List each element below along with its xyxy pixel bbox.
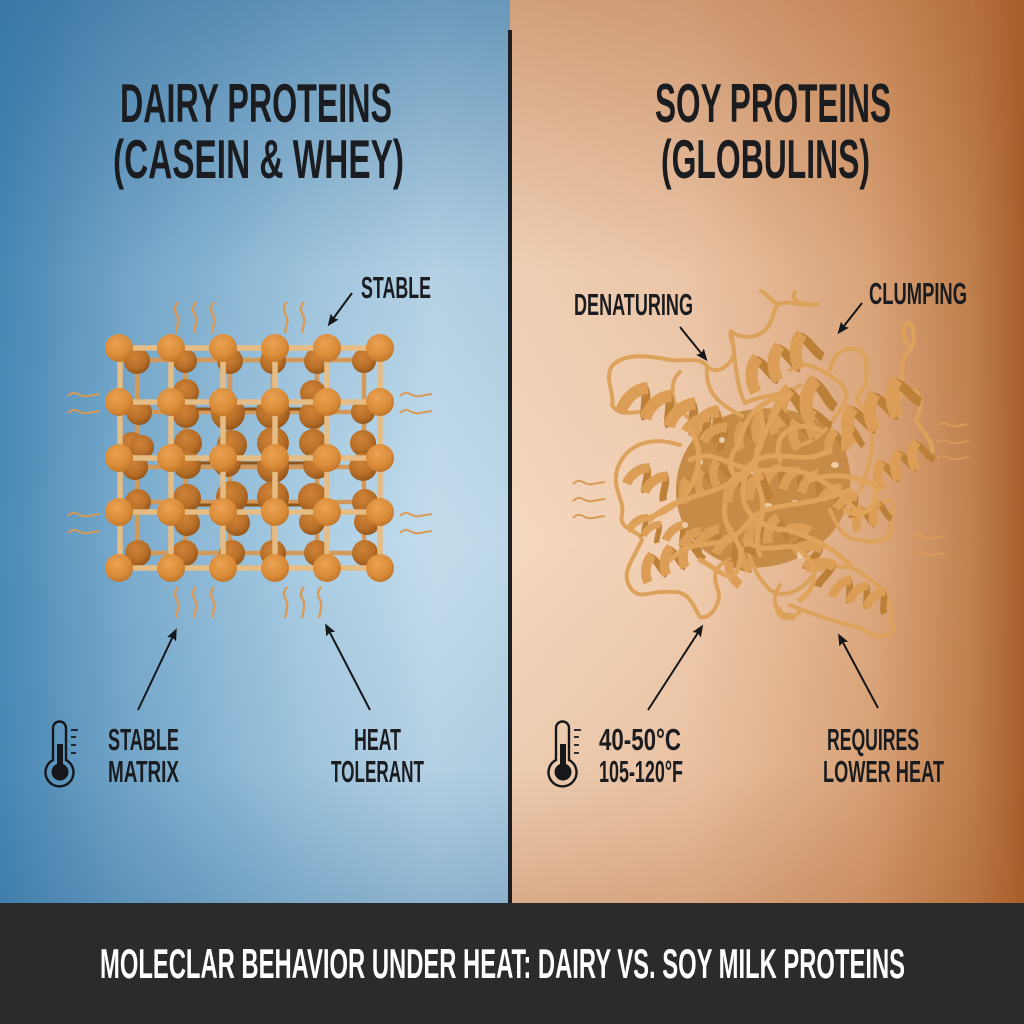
- label: temperature range: 105-120°F: [599, 754, 683, 789]
- chart: denatured soy protein tangle: [609, 291, 934, 636]
- label: stable matrix: MATRIX: [108, 754, 179, 789]
- center divider: [508, 30, 512, 903]
- heading: dairy proteins: DAIRY PROTEINS: [120, 72, 392, 134]
- label: stable matrix: STABLE: [108, 722, 179, 757]
- inner tangle strands: [630, 395, 876, 600]
- light gaps: [682, 437, 839, 559]
- callout: lower heat arrow: [840, 637, 878, 708]
- label: requires lower heat: REQUIRES: [827, 722, 919, 757]
- label: stable matrix: [108, 722, 179, 789]
- heat waves around soy tangle: [573, 423, 969, 555]
- callout: stable matrix arrow: [138, 632, 175, 710]
- heading: soy proteins: (GLOBULINS): [661, 128, 870, 190]
- outer helices: [621, 382, 727, 442]
- tangle core shading: [676, 408, 850, 568]
- callout: stable: [330, 270, 431, 323]
- callout: denaturing: [574, 287, 705, 358]
- heading: soy proteins: [655, 72, 891, 190]
- footer bar: [0, 903, 1024, 1024]
- label: heat tolerant: TOLERANT: [331, 754, 424, 789]
- icon: thermometer dairy: [45, 722, 78, 786]
- chart: stable protein lattice: [105, 334, 394, 582]
- icon: thermometer soy: [548, 722, 581, 786]
- callout: stable: STABLE: [361, 270, 431, 305]
- label: temperature range: 40-50°C: [599, 722, 681, 757]
- label: requires lower heat: LOWER HEAT: [823, 754, 944, 789]
- inner helices: [685, 410, 733, 452]
- callout: heat tolerant arrow: [327, 627, 370, 710]
- panel: soy proteins background: [510, 0, 1024, 903]
- callout: denaturing: DENATURING: [574, 287, 693, 322]
- label: heat tolerant: HEAT: [354, 722, 401, 757]
- outer strands: [609, 291, 933, 636]
- panel: dairy proteins background: [0, 0, 510, 903]
- label: heat tolerant: [331, 722, 424, 789]
- label: temperature range: [599, 722, 683, 789]
- label: requires lower heat: [823, 722, 944, 789]
- heading: dairy proteins: (CASEIN & WHEY): [113, 128, 404, 190]
- callout: clumping: [840, 276, 967, 331]
- heading: dairy proteins: [113, 72, 404, 190]
- heat waves around lattice: [68, 302, 432, 618]
- callout: temperature arrow: [648, 628, 701, 710]
